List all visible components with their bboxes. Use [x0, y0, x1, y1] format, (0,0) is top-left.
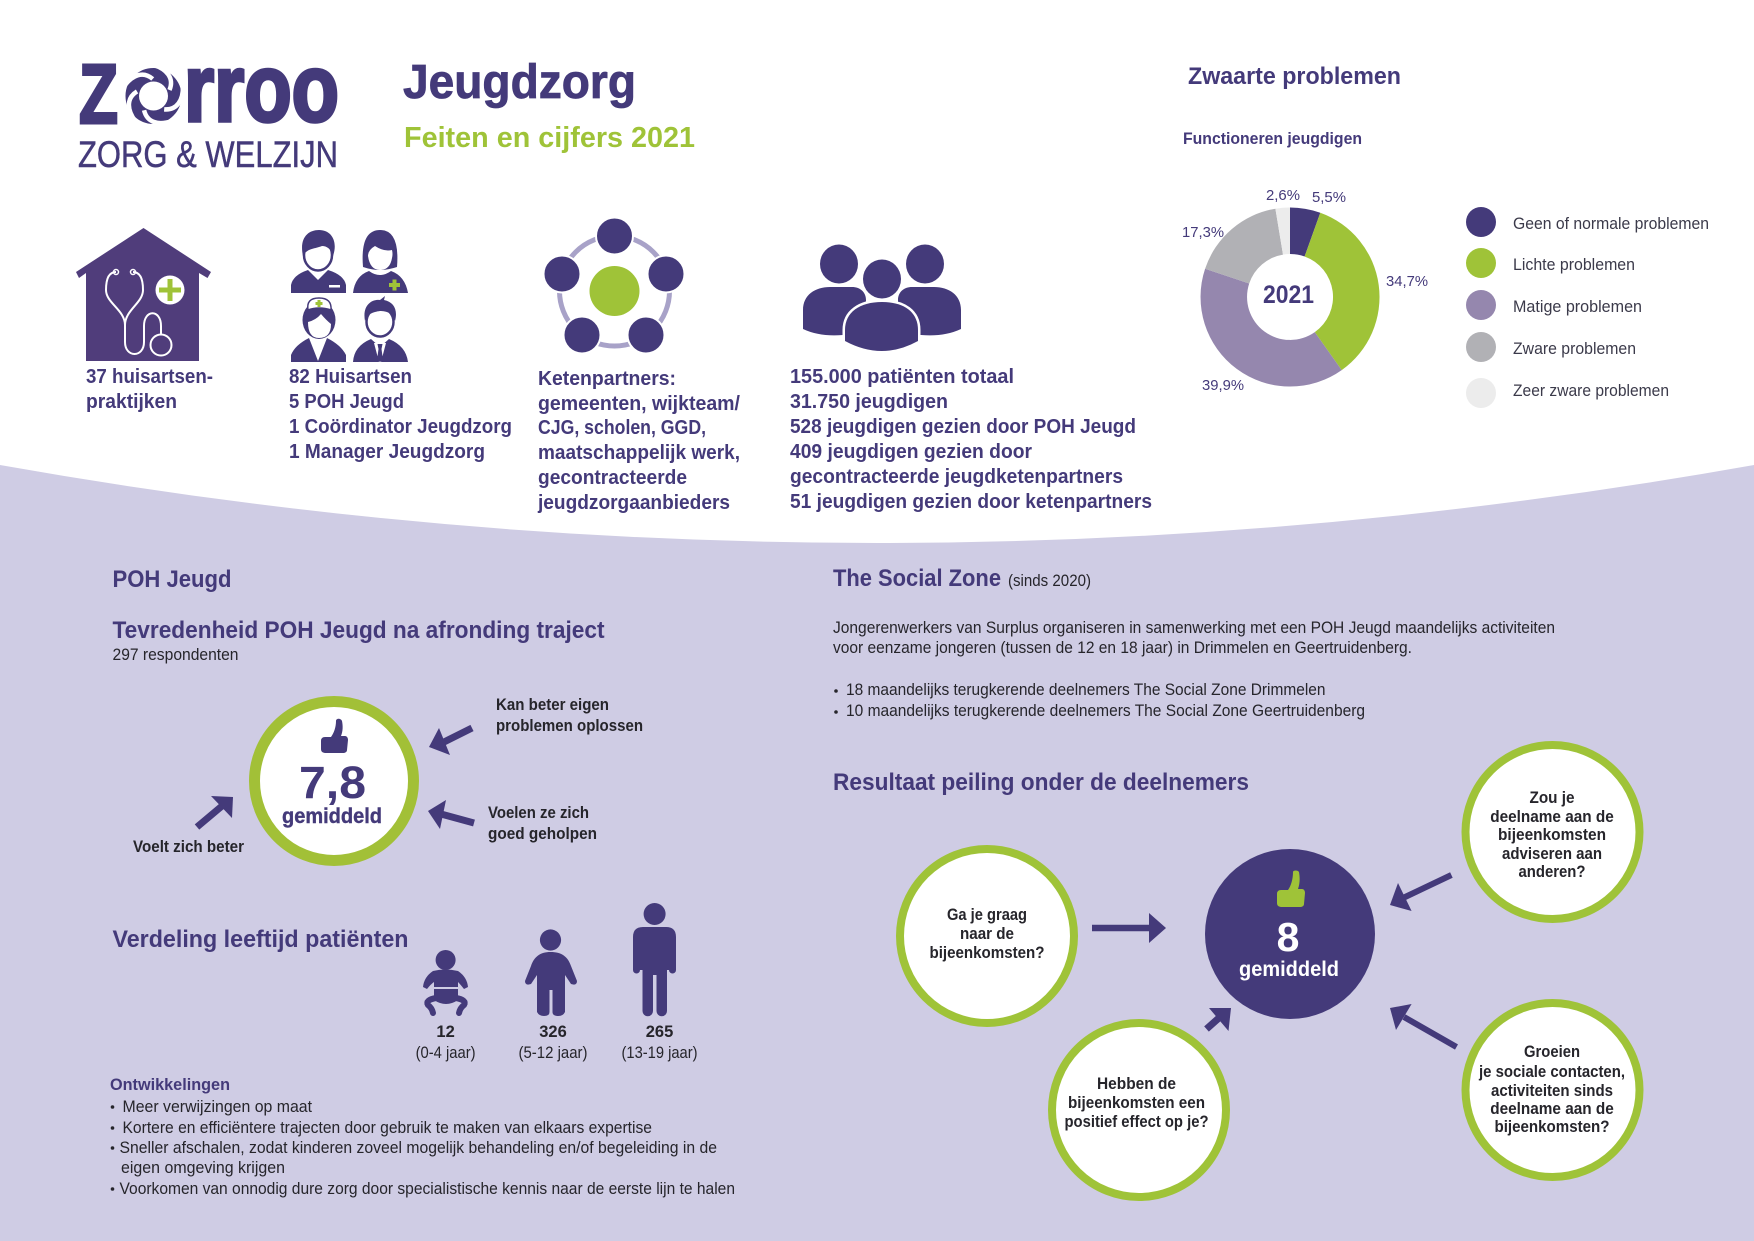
question circle: ga je graag: Ga je graag: [947, 906, 1027, 924]
heading: verdeling leeftijd: Verdeling leeftijd patiënten: [112, 926, 408, 953]
arrow: from sociale contacten: [1390, 1004, 1456, 1047]
text: social zone participants: 10 maandelijks terugkerende deelnemers The Social Zone Geertruidenberg: [846, 702, 1365, 720]
subheading: functioneren jeugdigen: Functioneren jeugdigen: [1183, 129, 1362, 148]
person: doctor: [291, 230, 346, 293]
icon: adult: [633, 903, 676, 1016]
icon: baby: [423, 950, 468, 1013]
text: huisartsenpraktijken: praktijken: [86, 391, 177, 413]
question circle: adviseren: adviseren aan: [1502, 845, 1602, 863]
question circle: ga je graag: bijeenkomsten?: [930, 944, 1044, 962]
question circle: positief effect: [1052, 1023, 1226, 1197]
question circle: positief effect: Hebben de: [1097, 1075, 1176, 1093]
icon: green thumbs up: [1277, 870, 1305, 907]
legend: Matige problemen: [1513, 298, 1642, 316]
question circle: sociale contacten: deelname aan de: [1490, 1100, 1614, 1118]
text block: ontwikkelingen: Kortere en efficiëntere trajecten door gebruik te maken van elkaars expertise: [122, 1119, 652, 1137]
legend: Geen of normale problemen: [1513, 215, 1709, 233]
text: social zone participants: 18 maandelijks terugkerende deelnemers The Social Zone Drimmelen: [846, 681, 1326, 699]
icon: child: [525, 929, 577, 1016]
logo: Zorroo Zorg & Welzijn: rroo: [184, 35, 339, 142]
icon: swirl: [121, 65, 188, 131]
text: huisartsenpraktijken: 37 huisartsen-: [86, 366, 213, 388]
text: voelt zich beter: Voelt zich beter: [133, 838, 245, 856]
question circle: ga je graag: naar de: [960, 925, 1014, 943]
score circle 7,8: [254, 702, 414, 860]
text: social zone description: Jongerenwerkers van Surplus organiseren in samenwerking met een POH Jeugd maandelijks activiteiten: [833, 619, 1555, 637]
score circle 8: [1205, 849, 1375, 1019]
text: patient numbers: 155.000 patiënten totaal: [790, 366, 1014, 388]
text: ketenpartners: maatschappelijk werk,: [538, 442, 740, 464]
age labels: 326: [539, 1023, 567, 1041]
arrow: goed geholpen: [428, 800, 474, 829]
question circle: adviseren: Zou je: [1530, 789, 1574, 807]
person: nurse: [291, 298, 346, 362]
title: Jeugdzorg: [403, 56, 636, 109]
text: patient numbers: 51 jeugdigen gezien door ketenpartners: [790, 491, 1152, 513]
age labels: 265: [646, 1023, 673, 1041]
text: patient numbers: gecontracteerde jeugdketenpartners: [790, 466, 1123, 488]
text: ketenpartners: gecontracteerde: [538, 467, 687, 489]
text: ketenpartners: CJG, scholen, GGD,: [538, 417, 706, 439]
text block: ontwikkelingen: Sneller afschalen, zodat kinderen zoveel mogelijk behandeling en/of begeleiding in de: [120, 1139, 717, 1157]
donut chart: [1182, 187, 1428, 394]
age labels: (13-19 jaar): [622, 1044, 698, 1062]
arrow: from positief effect: [1206, 1008, 1231, 1031]
question circle: positief effect: bijeenkomsten een: [1068, 1094, 1205, 1112]
legend: Zware problemen: [1513, 340, 1636, 358]
icon: network of chain partners: [544, 218, 684, 354]
heading: the social zone: (sinds 2020): [1008, 572, 1091, 590]
score circle 8: gemiddeld: [1239, 958, 1339, 981]
icon: four care professionals: [291, 230, 408, 362]
text block: ontwikkelingen: eigen omgeving krijgen: [121, 1159, 285, 1177]
subtitle: Feiten en cijfers 2021: [404, 122, 695, 154]
text: staff counts: 1 Coördinator Jeugdzorg: [289, 416, 512, 438]
legend: Zeer zware problemen: [1513, 382, 1669, 400]
text: social zone description: [833, 619, 1555, 657]
text: social zone participants: [834, 681, 1365, 720]
donut chart: 2,6%: [1266, 187, 1300, 204]
donut chart: 39,9%: [1202, 377, 1244, 394]
text: patient numbers: 31.750 jeugdigen: [790, 391, 948, 413]
heading: POH Jeugd: POH Jeugd: [112, 566, 232, 593]
person: female practitioner: [353, 230, 408, 293]
arrow: voelt zich beter: [197, 796, 233, 827]
text: huisartsenpraktijken: [86, 366, 213, 413]
age labels: (0-4 jaar): [416, 1044, 476, 1062]
score circle 8: 8: [1277, 914, 1299, 960]
lavender background panel with curved top: [0, 465, 1754, 1241]
text: ketenpartners: Ketenpartners:: [538, 368, 676, 390]
person: male manager: [353, 296, 408, 362]
question circle: ga je graag: [900, 849, 1074, 1023]
donut chart: 2021: [1263, 281, 1314, 309]
logo: Zorroo Zorg & Welzijn: ZORG & WELZIJN: [78, 134, 338, 175]
score circle 7,8: 7,8: [299, 757, 366, 808]
text: ketenpartners: [537, 368, 740, 514]
question circle: adviseren: deelname aan de: [1490, 808, 1614, 826]
heading: the social zone: The Social Zone: [833, 565, 1001, 592]
text: social zone description: voor eenzame jongeren (tussen de 12 en 18 jaar) in Drimmelen en Geertruidenberg.: [833, 639, 1412, 657]
text block: ontwikkelingen: Voorkomen van onnodig dure zorg door specialistische kennis naar de eerste lijn te halen: [120, 1180, 735, 1198]
text block: ontwikkelingen: [110, 1076, 735, 1198]
arrow: kan beter: [429, 728, 472, 755]
age labels: 12: [436, 1023, 455, 1041]
text: voelen ze zich goed geholpen: goed geholpen: [488, 825, 597, 843]
donut chart: 34,7%: [1386, 273, 1428, 290]
heading: zwaarte problemen: Zwaarte problemen: [1188, 63, 1401, 90]
question circle: sociale contacten: bijeenkomsten?: [1494, 1118, 1610, 1136]
text: patient numbers: 409 jeugdigen gezien door: [790, 441, 1032, 463]
text: staff counts: 82 Huisartsen: [289, 366, 412, 388]
question circle: adviseren: bijeenkomsten: [1498, 826, 1606, 844]
score circle 7,8: gemiddeld: [282, 805, 382, 828]
text: respondents: 297 respondenten: [112, 646, 238, 664]
text: staff counts: 1 Manager Jeugdzorg: [289, 441, 485, 463]
icon: thumbs up: [321, 719, 348, 753]
text block: ontwikkelingen: Ontwikkelingen: [110, 1076, 230, 1094]
donut chart: 5,5%: [1312, 189, 1346, 206]
icon: house with stethoscope: [76, 228, 211, 361]
text: voelen ze zich goed geholpen: [488, 804, 597, 843]
question circle: sociale contacten: activiteiten sinds: [1491, 1082, 1613, 1100]
question circle: sociale contacten: je sociale contacten,: [1478, 1063, 1625, 1081]
text: patient numbers: 528 jeugdigen gezien door POH Jeugd: [790, 416, 1136, 438]
text: ketenpartners: gemeenten, wijkteam/: [538, 393, 740, 415]
legend: Lichte problemen: [1513, 256, 1635, 274]
text: kan beter eigen problemen oplossen: Kan beter eigen: [496, 696, 609, 714]
icon: group of patients: [803, 244, 961, 351]
text: voelen ze zich goed geholpen: Voelen ze zich: [488, 804, 589, 822]
age labels: [416, 1023, 698, 1062]
legend: [1466, 207, 1709, 408]
text: kan beter eigen problemen oplossen: [496, 696, 643, 735]
question circle: sociale contacten: [1466, 1003, 1640, 1177]
question circle: adviseren: [1466, 745, 1640, 919]
arrow: from ga je graag: [1092, 913, 1166, 943]
text block: ontwikkelingen: Meer verwijzingen op maat: [122, 1098, 312, 1116]
text: kan beter eigen problemen oplossen: problemen oplossen: [496, 717, 643, 735]
text: staff counts: [289, 366, 512, 463]
age labels: (5-12 jaar): [518, 1044, 588, 1062]
text: staff counts: 5 POH Jeugd: [289, 391, 404, 413]
question circle: sociale contacten: Groeien: [1524, 1043, 1580, 1061]
logo: Zorroo Zorg & Welzijn: [78, 35, 339, 175]
question circle: positief effect: positief effect op je?: [1064, 1113, 1208, 1131]
question circle: adviseren: anderen?: [1518, 863, 1586, 881]
logo: Zorroo Zorg & Welzijn: Z: [79, 47, 118, 141]
heading: tevredenheid: Tevredenheid POH Jeugd na afronding traject: [112, 617, 605, 644]
heading: resultaat peiling: Resultaat peiling onder de deelnemers: [833, 769, 1249, 796]
donut chart: 17,3%: [1182, 224, 1224, 241]
text: ketenpartners: jeugdzorgaanbieders: [537, 492, 730, 514]
arrow: from adviseren: [1390, 875, 1451, 911]
text: patient numbers: [790, 366, 1152, 513]
